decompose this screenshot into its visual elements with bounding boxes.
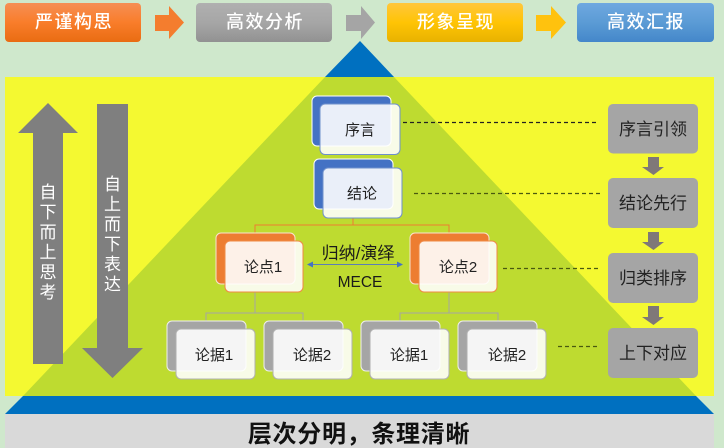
connector: 论点2 to 论据 [400, 292, 498, 321]
arrow down: 自上而下表达: 下 [104, 235, 121, 254]
double arrow [307, 262, 403, 268]
node: 论据1 (left): 论据1 [195, 347, 233, 364]
node: 论据2 (right): 论据2 [488, 347, 526, 364]
step 3: 形象呈现 [387, 3, 523, 42]
connector: 论点1 to 论据 [206, 292, 303, 321]
label: MECE: MECE [338, 274, 382, 291]
pyramid: blue apex [325, 41, 394, 77]
right box: 归类排序 [608, 253, 698, 303]
node: 论据2 (left) [264, 321, 352, 379]
step 2: 高效分析: 高效分析 [226, 12, 304, 32]
label: 归纳/演绎: 归纳/演绎 [322, 244, 394, 263]
arrow down: 自上而下表达: 而 [104, 215, 121, 234]
arrow up: 自下而上思考: 自 [40, 183, 56, 202]
step 2: 高效分析 [196, 3, 332, 42]
pyramid: blue base band [5, 396, 714, 414]
node: 论点2: 论点2 [439, 259, 477, 276]
right box: 上下对应 [608, 328, 698, 378]
arrow up: 自下而上思考 [18, 103, 78, 364]
arrow up: 自下而上思考: 思 [40, 263, 56, 282]
arrow: gray [346, 6, 375, 39]
node: 论点1 [216, 233, 303, 292]
arrow up: 自下而上思考: 上 [40, 243, 56, 262]
arrow: down 1 [642, 157, 664, 175]
arrow up: 自下而上思考: 下 [40, 203, 56, 222]
node: 结论 [314, 159, 402, 218]
arrow: down 3 [642, 306, 664, 325]
bottom banner [5, 414, 714, 448]
node: 论据2 (left): 论据2 [293, 347, 331, 364]
yellow panel [5, 77, 714, 396]
step 4: 高效汇报 [577, 3, 714, 42]
step 3: 形象呈现: 形象呈现 [417, 12, 495, 32]
node: 序言: 序言 [345, 122, 375, 139]
connector: 结论 to 论点 [255, 218, 449, 233]
arrow: orange [155, 6, 184, 39]
dashed leader lines [403, 122, 601, 346]
arrow down: 自上而下表达 [82, 104, 143, 378]
arrow up: 自下而上思考: 而 [40, 223, 56, 242]
right box: 序言引领 [608, 104, 698, 154]
arrow down: 自上而下表达: 上 [104, 195, 121, 214]
right box: 上下对应: 上下对应 [619, 344, 687, 363]
step 4: 高效汇报: 高效汇报 [607, 12, 685, 32]
arrow up: 自下而上思考: 考 [40, 283, 56, 302]
node: 结论: 结论 [347, 186, 377, 202]
arrow down: 自上而下表达: 表 [104, 255, 121, 274]
node: 论点2 [410, 233, 497, 292]
right box: 结论先行: 结论先行 [619, 194, 687, 213]
right box: 序言引领: 序言引领 [619, 120, 687, 139]
node: 序言 [312, 96, 400, 154]
right box: 归类排序: 归类排序 [619, 269, 687, 288]
node: 论据1 (left) [167, 321, 255, 379]
node: 论据2 (right) [458, 321, 546, 379]
node: 论点1: 论点1 [244, 259, 282, 276]
arrow down: 自上而下表达: 自 [104, 175, 121, 194]
node: 论据1 (right) [361, 321, 449, 379]
step 1: 严谨构思 [5, 3, 141, 42]
arrow down: 自上而下表达: 达 [104, 275, 121, 294]
arrow: down 2 [642, 232, 664, 250]
pyramid: green body [23, 77, 696, 396]
node: 论据1 (right): 论据1 [390, 347, 428, 364]
right box: 结论先行 [608, 178, 698, 228]
step 1: 严谨构思: 严谨构思 [35, 12, 113, 32]
banner text: 层次分明，条理清晰 [248, 421, 470, 448]
arrow: yellow [536, 6, 566, 39]
